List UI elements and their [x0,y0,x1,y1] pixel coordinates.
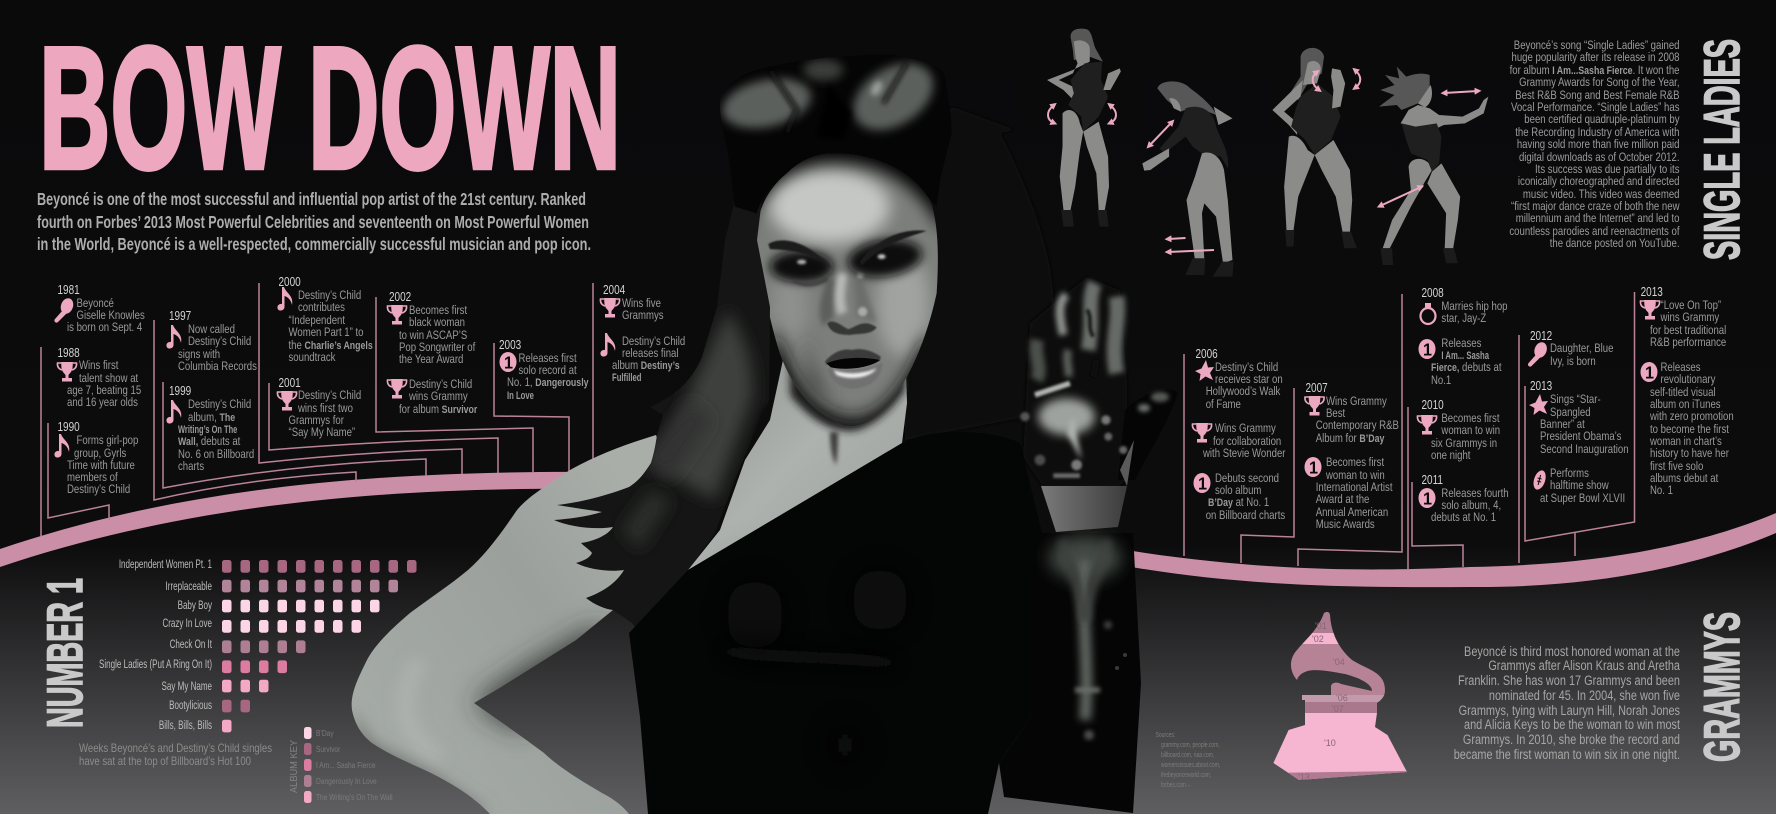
row: Bootylicious [169,700,250,713]
cheek lights [877,250,930,357]
chart: weeks at number one [99,559,416,733]
timeline band: left [0,472,600,567]
entry: 2007: Album for B’Day [1316,432,1385,445]
entry: 1997: Destiny’s Child [188,335,251,348]
entry: 1997: Columbia Records [178,360,257,373]
entry: 2013 Love On Top: history to have her [1650,447,1729,460]
timeline connectors: left [41,283,593,536]
left hair [554,190,770,648]
entry: 2004: Fulfilled [612,372,642,384]
row: Independent Women Pt. 1: Independent Women Pt. 1 [119,559,212,572]
Grammys paragraph: and Alicia Keys to be the woman to win most [1464,717,1680,732]
Single Ladies paragraph: Vocal Performance. “Single Ladies” has [1511,101,1680,114]
entry: 2011: debuts at No. 1 [1431,511,1496,524]
heading: Grammys: GRAMMYS [1694,612,1750,762]
Single Ladies paragraph: digital downloads as of October 2012. [1519,151,1680,164]
entry: 2013 Star-Spangled Banner: Sings “Star- [1550,393,1601,406]
entry: 2000: 2000 [278,276,301,289]
face [757,154,938,426]
entry: 2010: 2010 [1422,399,1444,412]
row: Bills, Bills, Bills: Bills, Bills, Bills [159,720,212,733]
entry: 2012 [1528,330,1613,368]
entry: 2013 Love On Top: albums debut at [1650,472,1718,485]
Single Ladies paragraph: the dance posted on YouTube. [1550,237,1680,250]
Single Ladies paragraph: Best R&B Song and Best Female R&B [1515,89,1680,102]
entry: 1990: Destiny’s Child [67,483,130,496]
Single Ladies paragraph: “first major dance craze of both the new [1511,200,1680,213]
entry: 1999: No. 6 on Billboard [178,448,254,461]
gramophone chart: '07 [1332,704,1344,714]
row: Crazy In Love [162,618,361,633]
entry: 2013 Love On Top: album on iTunes [1650,398,1721,411]
entry: 2013 Star-Spangled Banner: at Super Bowl XLVII [1540,492,1625,505]
Grammys paragraph: Beyoncé is third most honored woman at the [1464,644,1680,659]
entry: 2006: B’Day at No. 1 [1208,496,1269,509]
entry: 2004: Grammys [622,309,664,322]
entry: 2001: wins first two [297,402,353,415]
timeline band: right [1120,513,1776,587]
entry: 2007 [1304,382,1399,531]
entry: 2008: I Am... Sasha [1441,350,1490,362]
entry: 2013 Love On Top: wins Grammy [1660,311,1720,324]
entry: 2006: 2006 [1196,348,1218,361]
Single Ladies paragraph: huge popularity after its release in 2008 [1511,51,1680,64]
sources: womensissues.about.com, [1160,761,1220,769]
entry: 2006: Debuts second [1215,472,1279,485]
entry: 2000 [277,276,373,364]
dancer 4 [1379,67,1488,265]
album key: The Writing’s On The Wall [316,792,393,802]
entry: 2013 Love On Top: 2013 [1641,286,1663,299]
entry: 2003: solo record at [518,364,577,377]
entry: 1997: 1997 [169,310,191,323]
entry: 2013 Love On Top: to become the first [1650,423,1729,436]
entry: 2013 Star-Spangled Banner: President Obama’s [1540,430,1622,443]
entry: 2002: black woman [409,316,465,329]
entry: 2004: Wins five [622,297,661,310]
entry: 1999: 1999 [169,385,191,398]
entry: 1988: Wins first [79,359,118,372]
entry: 2010: six Grammys in [1431,437,1497,450]
entry: 1981: Giselle Knowles [76,309,145,322]
entry: 1997: Now called [188,323,235,336]
sources: Sources: [1156,731,1176,739]
entry: 2003 [499,339,589,402]
Single Ladies paragraph: having sold more than five million paid [1517,138,1680,151]
row: Check On It [170,639,306,653]
Single Ladies paragraph: been certified quadruple-platinum by [1524,113,1680,126]
row: Single Ladies: Single Ladies (Put A Ring On It) [99,659,212,672]
entry: 1990 [54,421,138,496]
thumb [1118,390,1178,480]
intro text: fourth on Forbes’ 2013 Most Powerful Celebrities and seventeenth on Most Powerful Women [37,212,589,232]
entry: 2002: wins Grammy [408,390,468,403]
row: Say My Name [162,680,268,694]
entry: 2008 [1418,287,1508,387]
timeline entries: left [54,276,685,496]
Grammys paragraph: Grammys after Alison Kraus and Aretha [1488,658,1680,673]
gramophone chart [1274,612,1407,780]
entry: 2011: solo album, 4, [1441,499,1501,512]
sources: forbes.com – [1161,781,1191,789]
Single Ladies paragraph [1509,39,1680,250]
entry: 2004 [600,284,685,384]
entry: 2013 Love On Top: with zero promotion [1649,410,1734,423]
entry: 2006: receives star on [1215,373,1283,386]
entry: 2008: Marries hip hop [1441,300,1508,313]
row: Independent Women Pt. 1 [119,559,416,573]
dance movement arrows [1048,70,1478,252]
headpiece [718,50,952,213]
entry: 1997 [166,310,257,373]
entry: 2007: Award at the [1316,493,1369,506]
entry: 2001: Grammys for [288,414,344,427]
chart caption: Weeks Beyoncé’s and Destiny’s Child singles [79,741,272,755]
intro text [37,189,591,254]
intro text: Beyoncé is one of the most successful and influential pop artist of the 21st century. Ranked [37,189,586,209]
entry: 2010: Becomes first [1441,412,1500,425]
row: Bootylicious: Bootylicious [169,700,212,713]
entry: 2003: In Love [507,390,534,402]
entry: 1997: signs with [178,348,220,361]
eyes [770,251,833,283]
entry: 1999: Wall, debuts at [178,435,240,448]
raised forearm and glove [999,277,1178,813]
cuff [1041,486,1127,532]
row: Check On It: Check On It [170,639,212,652]
entry: 2013 Star-Spangled Banner: halftime show [1550,479,1609,492]
gramophone chart: '02 [1312,634,1324,644]
entry: 2001: “Say My Name” [288,426,355,439]
dress [629,432,1042,814]
entry: 2013 Star-Spangled Banner: Banner” at [1540,418,1585,431]
row: Crazy In Love: Crazy In Love [162,618,212,631]
right hair mass [900,107,1053,440]
entry: 2013 Love On Top: self-titled visual [1650,386,1716,399]
entry: 1990: Time with future [67,459,135,472]
entry: 2007: Contemporary R&B [1316,419,1399,432]
entry: 2002: Pop Songwriter of [399,341,476,354]
dancer 3 [1272,48,1357,248]
entry: 2000: Women Part 1” to [288,326,364,339]
dance silhouettes: Single Ladies [1047,29,1488,277]
entry: 2006: Hollywood’s Walk [1206,385,1281,398]
entry: 2011: 2011 [1422,474,1443,487]
entry: 1988: 1988 [58,347,80,360]
entry: 2012: Daughter, Blue [1550,342,1613,355]
entry: 2003: 2003 [499,339,521,352]
entry: 1999: Writing’s On The [178,422,237,435]
sources: thebeyonceworld.com, [1161,771,1212,779]
entry: 2006: Wins Grammy [1215,422,1276,435]
jaw shadow [772,326,926,426]
entry: 1981 [54,284,145,334]
Single Ladies paragraph: Grammy Awards for Song of the Year, [1519,76,1680,89]
entry: 2011 [1418,474,1509,524]
sources: grammy.com, people.com, [1161,741,1220,749]
entry: 2000: “Independent [288,314,345,327]
timeline entries: right [1192,286,1734,531]
entry: 2008: star, Jay-Z [1441,312,1487,325]
row: Say My Name: Say My Name [162,681,212,694]
entry: 2001: 2001 [278,377,301,390]
entry: 2002 [387,291,477,416]
album key: I Am... Sasha Fierce [316,760,376,770]
entry: 2013 Love On Top: first five solo [1650,460,1703,473]
entry: 2011: Releases fourth [1441,487,1509,500]
entry: 2000: soundtrack [288,351,336,364]
entry: 2006: for collaboration [1213,435,1281,448]
entry: 2006: of Fame [1206,398,1241,411]
Grammys paragraph: nominated for 45. In 2004, she won five [1489,688,1680,703]
entry: 2002: 2002 [389,291,411,304]
entry: 2006 [1192,348,1286,522]
entry: 2003: No. 1, Dangerously [507,376,589,389]
entry: 2013 Love On Top: R&B performance [1650,336,1726,349]
entry: 2004: releases final [622,347,679,360]
entry: 2002: to win ASCAP’S [399,329,467,342]
entry: 2007: Annual American [1316,506,1388,519]
entry: 2008: Fierce, debuts at [1431,361,1501,374]
hairline shadow [759,154,936,234]
entry: 2013 Love On Top: revolutionary [1660,373,1716,386]
row: Irreplaceable: Irreplaceable [166,581,212,594]
entry: 1988: and 16 year olds [67,396,138,409]
entry: 1990: 1990 [58,421,80,434]
gramophone chart: '10 [1324,738,1336,748]
album key: B’Day [316,728,334,738]
album key: ALBUM KEY [288,740,300,793]
heading: Number 1: NUMBER 1 [37,578,93,728]
entry: 2008: No.1 [1431,374,1451,387]
entry: 2013 Star-Spangled Banner: Second Inauguration [1540,443,1629,456]
entry: 2001 [277,377,361,439]
album key: Dangerously In Love [316,776,377,786]
entry: 1990: members of [67,471,119,484]
entry: 1988: talent show at [79,372,138,385]
entry: 2006: Destiny’s Child [1215,361,1278,374]
entry: 2013 Star-Spangled Banner [1529,380,1629,505]
entry: 2013 Love On Top: for best traditional [1650,324,1726,337]
hair streaks [622,312,762,546]
entry: 2000: the Charlie’s Angels [288,339,373,352]
entry: 2010: one night [1431,449,1470,462]
album key [288,727,393,803]
Grammys paragraph: Grammys. In 2010, she broke the record and [1463,732,1680,747]
entry: 2013 Star-Spangled Banner: 2013 [1530,380,1552,393]
entry: 2006: on Billboard charts [1206,509,1286,522]
entry: 2008: 2008 [1422,287,1444,300]
entry: 1988 [57,347,141,409]
chart caption: have sat at the top of Billboard’s Hot 100 [79,754,251,768]
gramophone chart: '13 [1298,772,1310,782]
central figure illustration [352,50,1178,814]
entry: 1999: album, The [188,411,236,424]
entry: 1990: group, Gyrls [74,447,127,460]
dancer 2 [1142,81,1233,277]
row: Single Ladies [99,659,287,673]
sleeve [999,533,1141,813]
entry: 2013 Love On Top: Releases [1660,361,1701,374]
Single Ladies paragraph: countless parodies and reenactments of [1509,225,1680,238]
entry: 1981: 1981 [58,284,80,297]
album key: Survivor [316,744,341,754]
Single Ladies paragraph: Its success was due partially to its [1535,163,1680,176]
Single Ladies paragraph: music video. This video was deemed [1523,188,1680,201]
Grammys paragraph: became the first woman to win six in one night. [1454,747,1680,762]
gramophone chart: '06 [1336,693,1348,703]
entry: 2013 Love On Top: woman in chart’s [1649,435,1722,448]
entry: 2013 Star-Spangled Banner: Spangled [1550,406,1591,419]
entry: 2006: with Stevie Wonder [1202,447,1286,460]
gramophone chart: '01 [1315,621,1327,631]
forehead light [770,170,890,243]
entry: 2002: Destiny’s Child [409,378,472,391]
entry: 2013 Love On Top: “Love On Top” [1660,299,1721,312]
mouth [825,349,881,365]
entry: 2007: Wins Grammy [1326,395,1387,408]
Single Ladies paragraph: iconically choreographed and directed [1518,175,1680,188]
Grammys paragraph: Franklin. She has won 17 Grammys and been [1458,673,1680,688]
entry: 1981: is born on Sept. 4 [67,321,142,334]
chart caption [79,741,272,768]
entry: 2008: Releases [1441,337,1482,350]
Single Ladies paragraph: Beyoncé’s song “Single Ladies” gained [1514,39,1680,52]
entry: 2013 Love On Top: No. 1 [1650,484,1673,497]
Single Ladies paragraph: for album I Am...Sasha Fierce. It won the [1510,64,1680,77]
entry: 2004: Destiny’s Child [622,335,685,348]
entry: 2002: for album Survivor [399,403,477,416]
entry: 2012: Ivy, is born [1550,355,1596,368]
entry: 2007: woman to win [1325,469,1385,482]
entry: 2013 Love On Top [1640,286,1734,497]
entry: 2012: 2012 [1530,330,1552,343]
intro text: in the World, Beyoncé is a well-respected, commercially successful musician and pop icon. [37,234,591,254]
entry: 2000: Destiny’s Child [298,289,361,302]
row: Baby Boy: Baby Boy [178,600,213,613]
entry: 2007: 2007 [1306,382,1328,395]
Grammys paragraph [1454,644,1680,762]
entry: 2010: woman to win [1441,424,1500,437]
dancer 1 [1047,29,1121,227]
entry: 2004: album Destiny’s [612,359,680,372]
left arm [352,435,680,814]
black glove backing [1023,277,1127,487]
entry: 2003: Releases first [518,352,577,365]
timeline connectors: right [1184,292,1634,570]
entry: 2000: contributes [298,301,345,314]
entry: 2013 Star-Spangled Banner: Performs [1550,467,1589,480]
nose [827,322,877,335]
entry: 2001: Destiny’s Child [298,389,361,402]
Single Ladies paragraph: the Recording Industry of America with [1515,126,1680,139]
entry: 2006: solo album [1215,484,1261,497]
row: Irreplaceable [166,580,398,594]
neck and chest [688,340,907,570]
Grammys paragraph: Grammys, tying with Lauryn Hill, Norah Jones [1459,703,1680,718]
entry: 2007: International Artist [1316,481,1393,494]
Single Ladies paragraph: millennium and the Internet” and led to [1516,212,1680,225]
title: BOW DOWN [39,10,621,205]
entry: 1990: Forms girl-pop [76,434,138,447]
entry: 2004: 2004 [603,284,625,297]
row: Baby Boy [178,600,380,613]
entry: 1999: charts [178,460,205,473]
entry: 2007: Becomes first [1326,456,1384,469]
sources [1156,731,1220,789]
entry: 2010 [1417,399,1500,462]
entry: 1999: Destiny’s Child [188,398,251,411]
glove highlights [1020,283,1127,478]
entry: 2002: the Year Award [399,353,463,366]
entry: 1981: Beyoncé [76,297,114,310]
entry: 1988: age 7, beating 15 [67,384,141,397]
entry: 2007: Best [1326,407,1345,420]
entry: 2007: Music Awards [1316,518,1375,531]
entry: 2002: Becomes first [409,304,467,317]
entry: 1999 [166,385,254,473]
gramophone chart: '04 [1333,657,1345,667]
sources: billboard.com, riaa.com, [1161,751,1215,759]
